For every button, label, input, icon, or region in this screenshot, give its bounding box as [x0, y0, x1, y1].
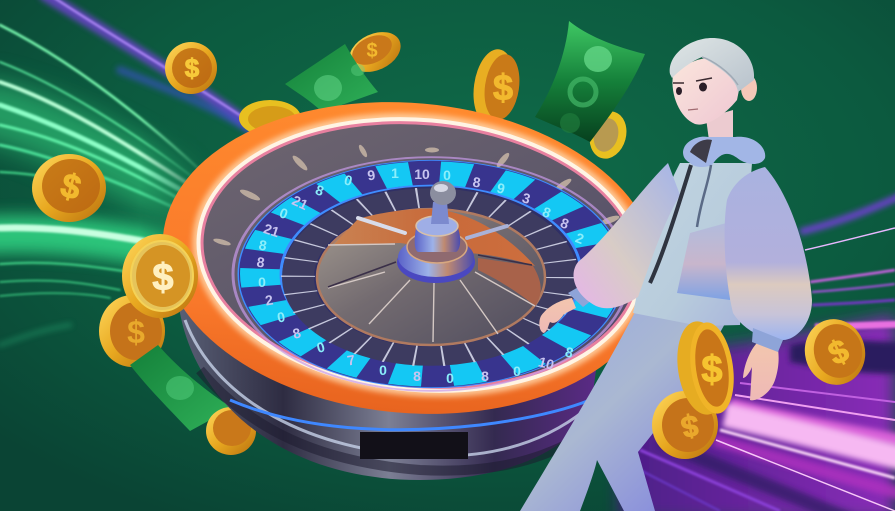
- wheel numbers: 2: [573, 229, 586, 247]
- torso: [633, 163, 752, 326]
- left sleeve: [574, 163, 680, 308]
- coin: right: [797, 312, 873, 392]
- banknote: top left: [285, 44, 378, 112]
- coin: behind leg: [652, 391, 718, 459]
- coin: behind right banknote: [584, 107, 632, 163]
- hoodie pocket flap: [677, 220, 737, 300]
- wheel numbers: 7: [346, 351, 357, 369]
- banknote: top right: [535, 21, 645, 142]
- coin: bottom left under wheel: [206, 407, 256, 455]
- coin: top behind wheel left: [239, 100, 301, 136]
- wheel numbers: 8: [313, 181, 326, 199]
- pocket spokes: [298, 198, 562, 356]
- wheel numbers: 0: [276, 308, 287, 326]
- drawstrings: [650, 165, 711, 283]
- right cuff: [752, 328, 783, 352]
- coin: top centre on edge: $: [493, 67, 513, 108]
- wheel numbers: 0: [443, 167, 451, 183]
- left cuff: [568, 285, 592, 307]
- wheel numbers: 10: [537, 353, 556, 373]
- coin: front large: $: [701, 349, 723, 391]
- wheel numbers: 0: [513, 363, 521, 379]
- wheel numbers: 0: [379, 362, 387, 378]
- coin: top tilted: [343, 24, 407, 80]
- wheel numbers: 0: [258, 274, 266, 290]
- coin: front left large: $: [152, 257, 174, 299]
- coin: front left large: [122, 234, 198, 318]
- hood: [683, 137, 765, 167]
- wheel numbers: 8: [558, 214, 571, 232]
- wheel numbers: 3: [520, 189, 532, 207]
- wheel numbers: 9: [496, 179, 507, 197]
- wheel numbers: 2: [264, 291, 275, 309]
- neck: [706, 110, 733, 148]
- person: [520, 38, 812, 511]
- coin: left large: $: [57, 166, 85, 208]
- wheel numbers: 0: [277, 204, 290, 222]
- spindle arms: [358, 218, 507, 238]
- wheel numbers: 8: [540, 203, 553, 221]
- wheel numbers: 9: [366, 167, 376, 184]
- wheel numbers: 8: [563, 343, 575, 361]
- coin: behind left: $: [127, 314, 145, 350]
- centre disc: [317, 209, 545, 345]
- wheel numbers: 8: [258, 237, 268, 254]
- wheel numbers: 0: [342, 171, 354, 189]
- light streaks: right purple and magenta: [620, 194, 895, 511]
- coin: top left: [165, 42, 217, 94]
- banknote: bottom left: [130, 345, 232, 431]
- wheel numbers: 10: [414, 166, 430, 182]
- orange rim: [149, 82, 671, 434]
- wheel numbers: 1: [391, 165, 399, 181]
- wheel numbers: 8: [481, 368, 489, 384]
- right hand: [743, 343, 779, 400]
- coin: behind leg: $: [679, 408, 701, 443]
- number ring: [233, 157, 629, 391]
- wheel numbers: 21: [262, 220, 282, 240]
- coin: behind left: [99, 295, 165, 367]
- right sleeve: [725, 167, 812, 340]
- wheel numbers: 8: [472, 174, 482, 191]
- light streaks: left green: [0, 25, 200, 345]
- wheel numbers: 8: [256, 254, 266, 271]
- ball track markers: [213, 144, 620, 247]
- wheel numbers: 0: [315, 338, 327, 356]
- left hand: [539, 298, 576, 333]
- wheel numbers: 8: [413, 368, 421, 384]
- wheel numbers: 0: [446, 370, 454, 386]
- coin: top tilted: $: [366, 40, 378, 62]
- legs: [520, 312, 728, 511]
- light streaks: top-left purple: [45, 0, 250, 130]
- coin: top left: $: [185, 53, 200, 83]
- coin: right: $: [823, 332, 854, 372]
- wheel numbers: 21: [290, 192, 311, 213]
- coin: front large: [672, 318, 739, 418]
- coin: top centre on edge: [469, 47, 523, 127]
- wheel base: [178, 300, 600, 480]
- coin: left large: [32, 154, 106, 222]
- wheel numbers: 8: [291, 324, 303, 342]
- neon rim light: [187, 101, 653, 409]
- roulette wheel: [149, 82, 671, 480]
- head: [670, 38, 757, 125]
- wheel numbers: [256, 165, 586, 386]
- spindle hub: [397, 181, 475, 283]
